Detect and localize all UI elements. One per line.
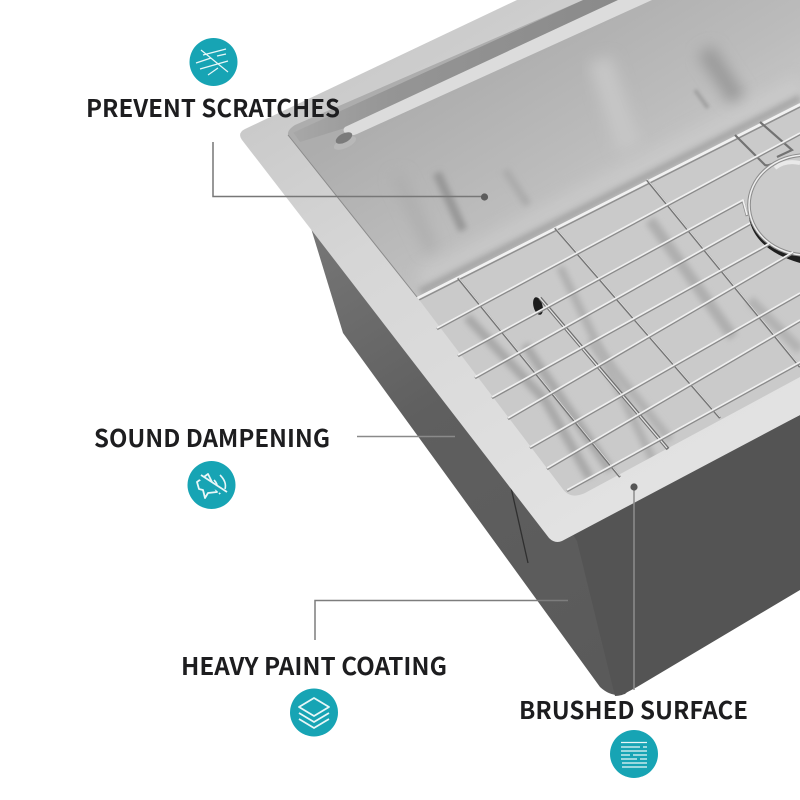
icon: layers — [290, 688, 338, 736]
basin back wall — [288, 0, 800, 297]
heading: heavy paint coating: HEAVY PAINT COATING — [181, 648, 447, 683]
drain basket — [749, 155, 800, 263]
rail — [344, 0, 652, 135]
side seam — [510, 483, 528, 563]
callout line: prevent scratches — [213, 142, 488, 201]
cross wires — [458, 122, 800, 477]
heading: brushed surface: BRUSHED SURFACE — [519, 692, 748, 727]
sink body: left side — [310, 225, 640, 695]
basin inner edge shade — [288, 135, 417, 297]
heading: sound dampening: SOUND DAMPENING — [94, 420, 330, 455]
wall shading — [290, 0, 800, 292]
callout line: heavy paint coating — [315, 600, 568, 640]
rail end hole — [332, 130, 358, 153]
long wires — [437, 133, 800, 491]
icon: brushed lines — [610, 730, 658, 778]
icon: scratches — [190, 38, 238, 86]
sink body: front side — [570, 415, 800, 696]
rim — [240, 0, 800, 542]
callout line: sound dampening — [357, 436, 455, 438]
sink photo — [240, 0, 800, 696]
basin floor — [417, 103, 800, 496]
icon: muted speaker — [188, 461, 236, 509]
heading: prevent scratches: PREVENT SCRATCHES — [86, 90, 340, 125]
floor shadows — [417, 104, 800, 478]
callout line: brushed surface — [630, 483, 638, 690]
center rod and hole — [531, 296, 668, 449]
